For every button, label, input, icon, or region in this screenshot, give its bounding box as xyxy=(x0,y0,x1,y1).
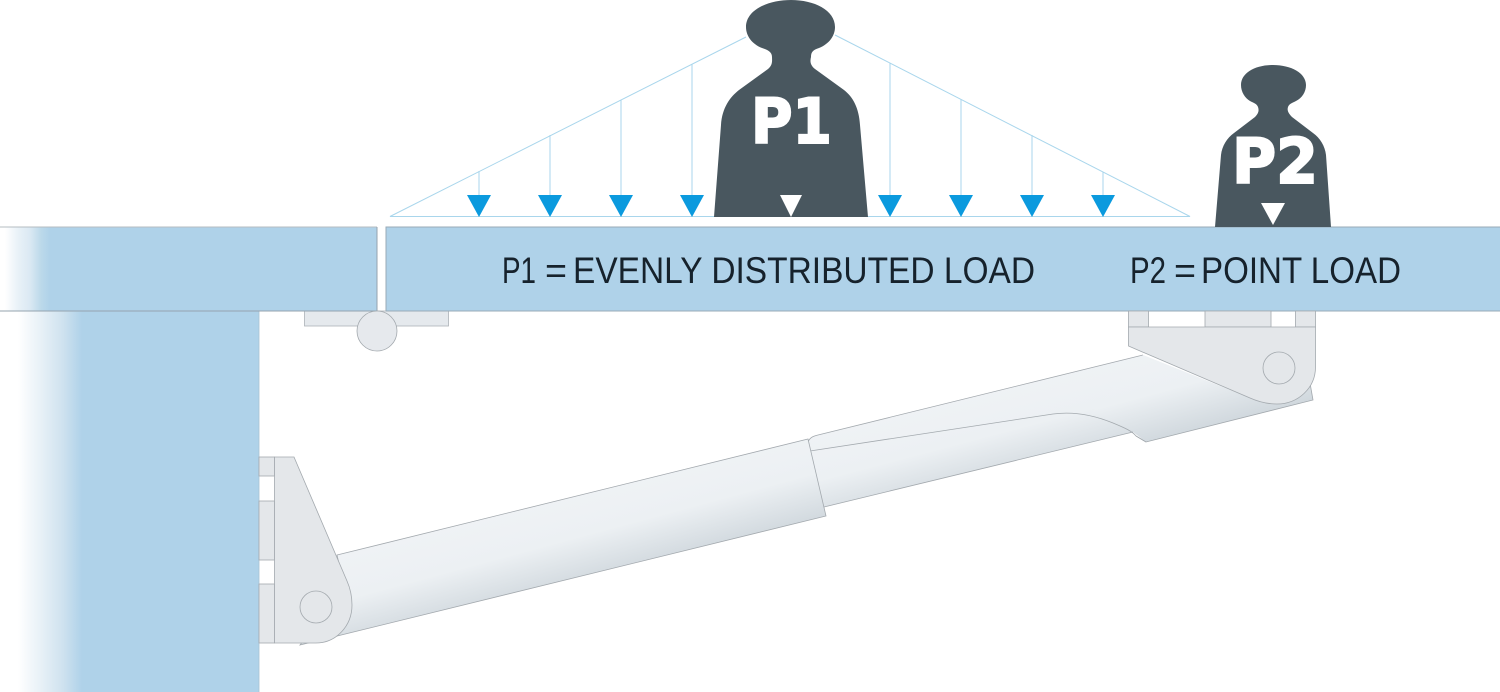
distributed load diagram xyxy=(390,35,1190,217)
fixed deck section xyxy=(0,227,377,311)
load label P1: EVENLY DISTRIBUTED LOAD xyxy=(573,250,1035,291)
rod lower edge xyxy=(824,432,1133,507)
load label P2: = xyxy=(1174,250,1196,291)
moving deck section xyxy=(386,227,1500,311)
weight P2: P2 xyxy=(1232,125,1318,198)
hinge pin xyxy=(357,311,397,351)
lower mounting bracket xyxy=(259,457,352,643)
weight P1: P1 xyxy=(751,85,832,158)
piston rod xyxy=(808,355,1313,507)
load label P1: = xyxy=(545,250,567,291)
hydraulic cylinder xyxy=(300,355,1313,645)
cylinder barrel xyxy=(300,439,826,645)
load label P1: P1 xyxy=(502,250,536,291)
hinge plate xyxy=(304,311,448,326)
upper mounting bracket xyxy=(1128,311,1316,404)
sleeve lower edge xyxy=(1136,383,1313,442)
load label P2: P2 xyxy=(1130,250,1166,291)
load label P2: POINT LOAD xyxy=(1201,250,1401,291)
rod flank curve xyxy=(810,413,1146,451)
weight P1 xyxy=(714,0,868,217)
rod sleeve xyxy=(1090,355,1313,442)
rod upper edge xyxy=(808,355,1143,442)
weight P2 xyxy=(1215,65,1331,227)
load label P2 xyxy=(1130,250,1401,291)
column: bridge abutment xyxy=(0,311,259,692)
